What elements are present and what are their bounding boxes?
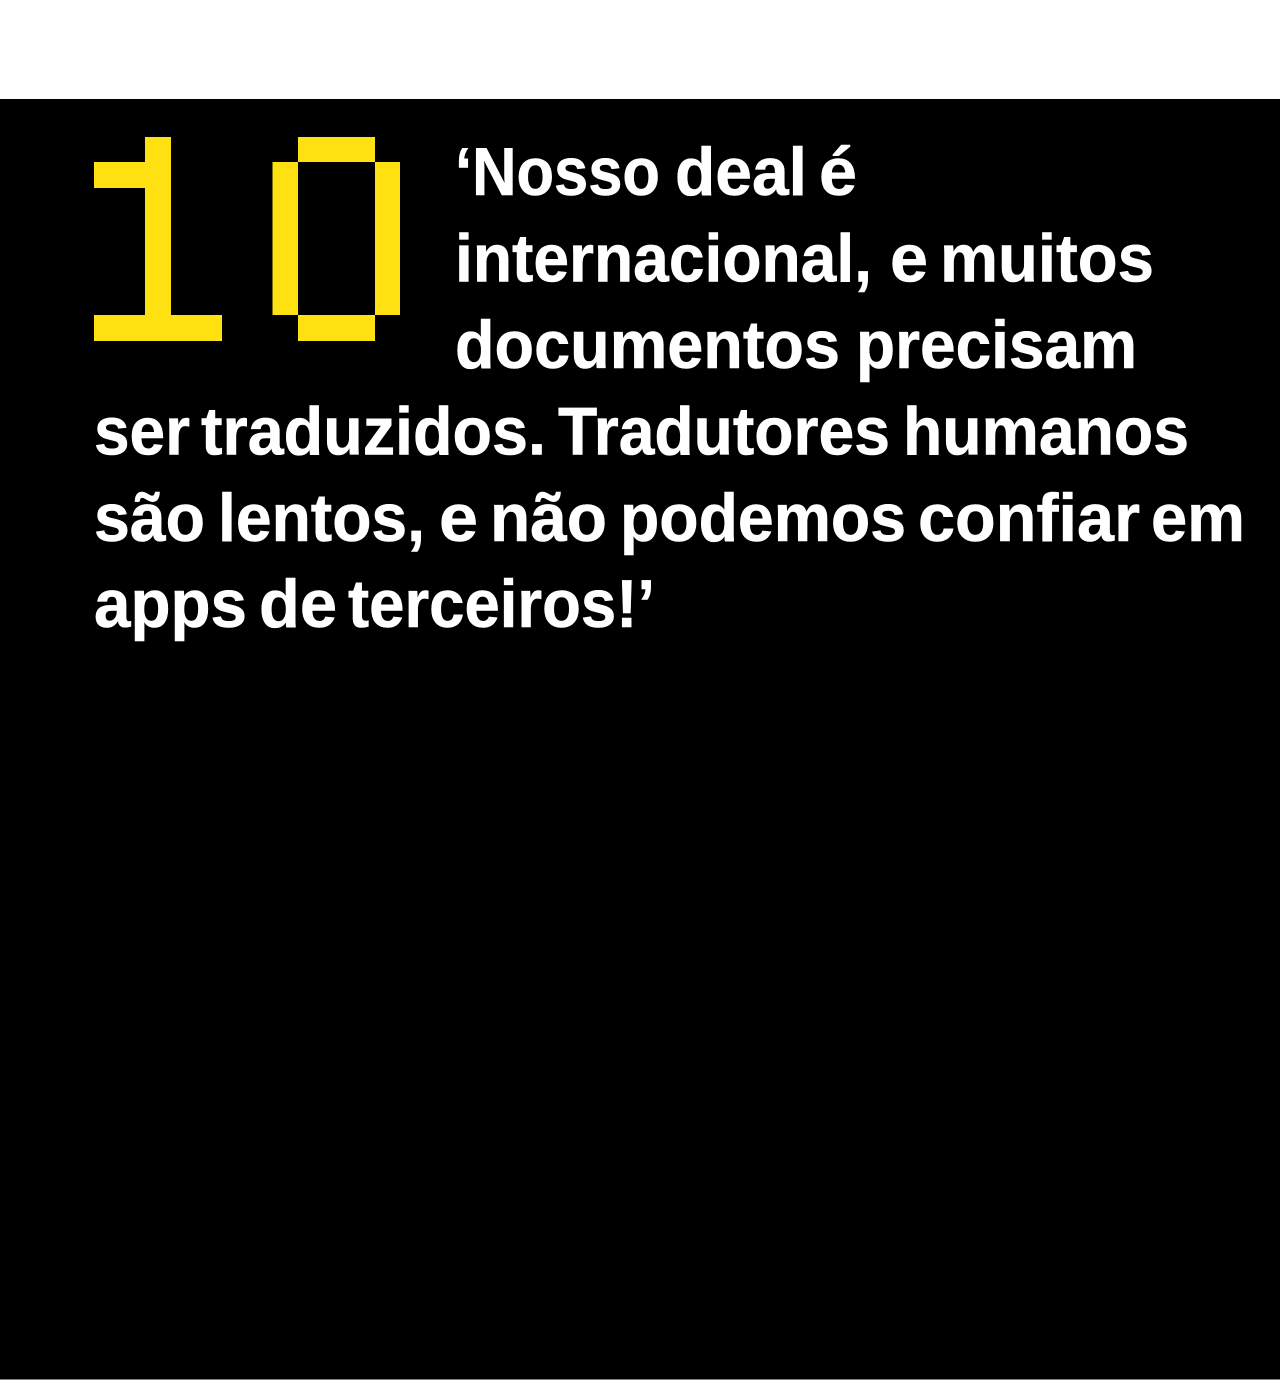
quote text block: terceiros!’ [348,566,655,642]
quote text block: não [490,480,607,556]
quote text block: humanos [903,394,1189,470]
quote text block: documentos [455,307,840,383]
quote text block: de [259,566,337,642]
quote text block [94,134,1245,642]
quote text block: deal [675,134,807,210]
quote text block: traduzidos. [201,394,546,470]
quote text block: são [94,480,205,556]
pixel digit: 0 [272,137,400,341]
quote text block: confiar [918,480,1140,556]
quote text block: internacional, [455,220,872,296]
quote text block: ser [94,394,190,470]
quote text block: apps [94,566,247,642]
quote text block: podemos [620,480,906,556]
quote text block: muitos [940,220,1154,296]
pixel numeral: 10 [94,137,400,341]
quote text block: lentos, [218,480,425,556]
pixel digit: 1 [94,137,222,341]
quote text block: em [1151,480,1245,556]
quote text block: e [439,480,478,556]
quote text block: precisam [856,307,1137,383]
quote text block: ‘Nosso [455,134,660,210]
quote text block: Tradutores [558,394,890,470]
quote text block: é [819,134,857,210]
quote text block: e [890,220,928,296]
